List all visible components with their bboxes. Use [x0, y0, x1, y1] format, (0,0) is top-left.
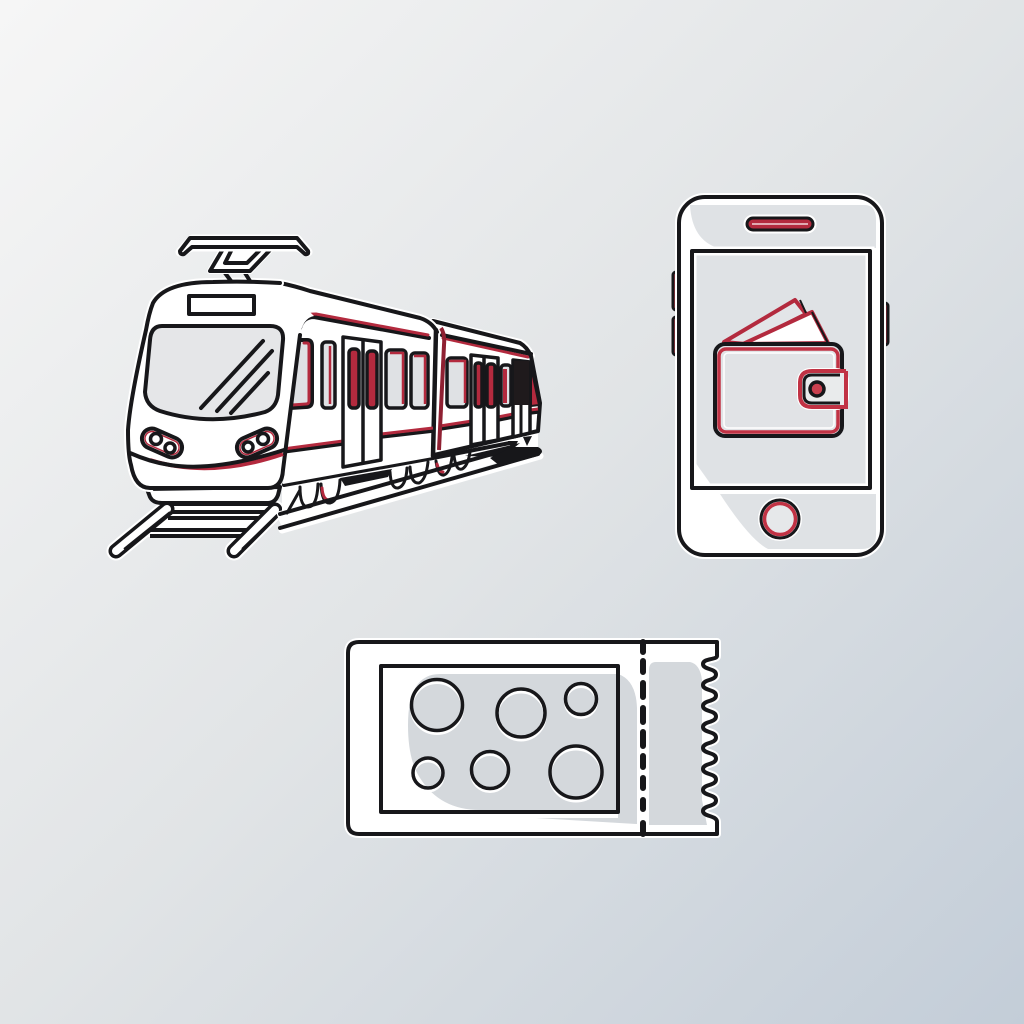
left rail	[116, 509, 167, 551]
left headlight	[139, 425, 185, 461]
cab stripe	[130, 450, 284, 468]
windshield	[145, 326, 283, 419]
wallet clasp	[800, 371, 846, 407]
wallet cards	[724, 300, 828, 344]
wallet	[715, 300, 846, 436]
track white halo	[116, 509, 275, 551]
phone body outline	[679, 197, 882, 555]
icon: train on tracks	[116, 238, 542, 551]
ticket inner panel	[381, 666, 618, 812]
ticket body	[348, 642, 717, 834]
red side stripe	[283, 428, 433, 452]
ticket circle highlights	[412, 682, 602, 801]
phone body	[679, 197, 882, 555]
right headlight	[234, 425, 280, 461]
train tracks	[116, 449, 540, 551]
phone speaker	[747, 218, 813, 230]
wheels	[300, 452, 470, 507]
train second carriage	[433, 321, 540, 456]
right rail	[234, 510, 275, 551]
pantograph	[180, 238, 308, 281]
ticket shaded areas	[408, 662, 707, 825]
ticket outline	[348, 642, 717, 834]
train front carriage	[213, 282, 444, 484]
second carriage stripe	[440, 409, 538, 429]
main rail	[276, 449, 540, 528]
phone side buttons	[673, 272, 888, 355]
ticket circles	[412, 680, 602, 798]
phone screen	[692, 251, 870, 488]
train undercarriage	[280, 430, 542, 528]
icon: smartphone with wallet	[673, 197, 888, 555]
phone glass highlights	[690, 205, 876, 549]
carriage joint	[433, 330, 436, 456]
destination sign	[189, 296, 254, 314]
icon: perforated ticket	[348, 642, 717, 834]
rail lines	[280, 449, 538, 528]
train cab front	[128, 282, 314, 488]
ticket perforation	[640, 642, 646, 834]
door	[343, 337, 381, 467]
train bumper	[147, 487, 280, 503]
wallet body	[715, 344, 842, 436]
phone home button	[758, 497, 802, 541]
windshield reflections	[201, 341, 272, 413]
sleepers	[146, 506, 274, 537]
